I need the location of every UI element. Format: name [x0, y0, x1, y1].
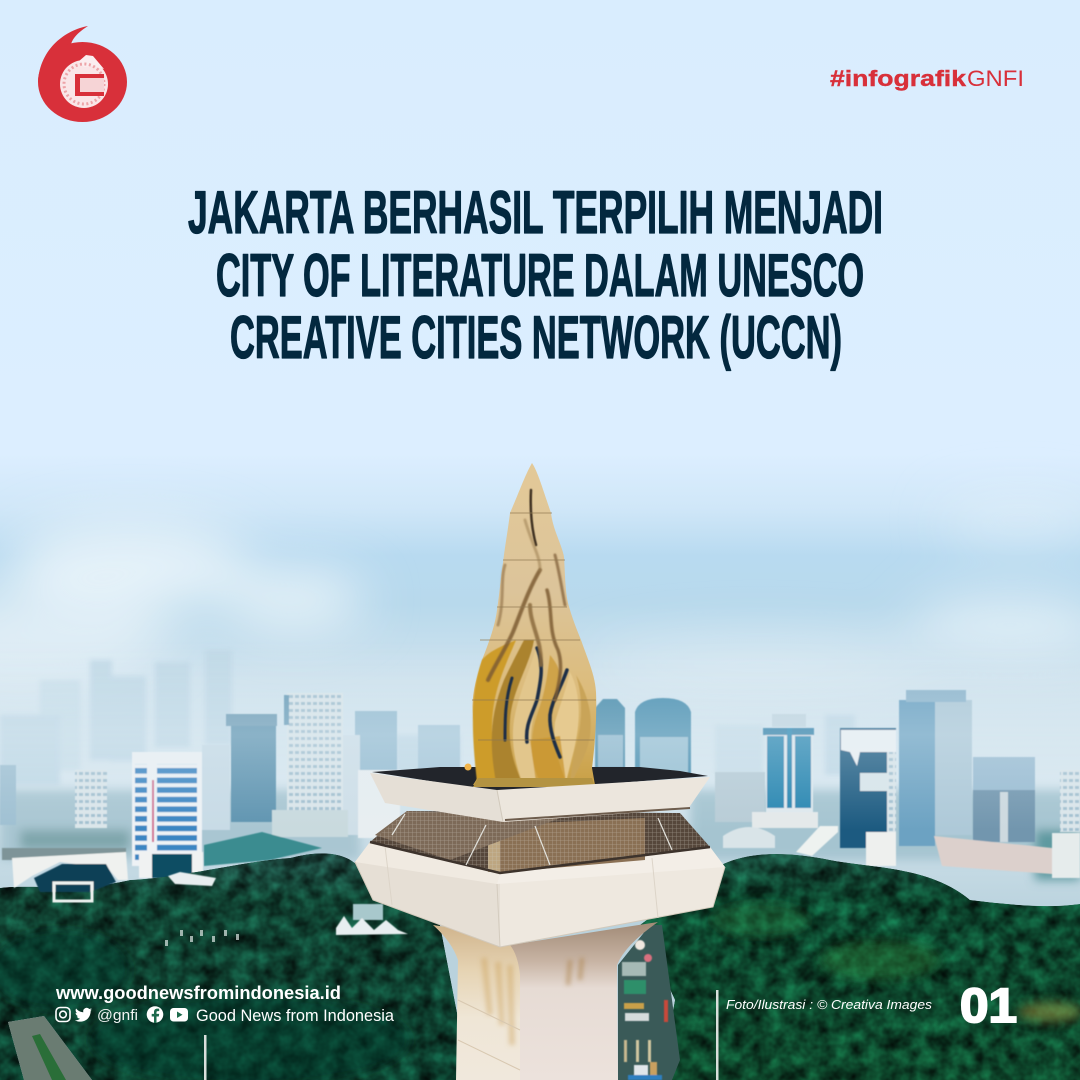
title — [188, 179, 883, 371]
icon: facebook — [147, 1006, 163, 1023]
white striped tower — [132, 752, 203, 878]
hashtag label: GNFI — [967, 66, 1024, 91]
upper bowl top — [372, 767, 708, 792]
construction tower — [272, 693, 348, 837]
crowded road — [618, 925, 680, 1080]
icon: twitter — [75, 1008, 92, 1022]
lamp poles — [204, 990, 718, 1080]
white block by monument — [358, 770, 400, 838]
icon: instagram — [56, 1008, 70, 1022]
right city buildings — [715, 690, 1080, 878]
teal roof — [204, 832, 322, 866]
buildings behind flame — [595, 698, 691, 775]
left low building — [2, 848, 128, 901]
hashtag label — [830, 66, 1024, 91]
photo credit: Foto/Ilustrasi : © Creativa Images — [726, 997, 933, 1012]
handle: @gnfi — [97, 1007, 138, 1024]
left city buildings — [0, 693, 460, 878]
parked cars — [165, 930, 239, 946]
blue tower — [226, 714, 277, 822]
upper bowl platform — [370, 764, 710, 822]
right middle blocks — [973, 757, 1035, 842]
low pink building — [934, 836, 1052, 874]
forest left — [0, 853, 470, 1080]
hashtag label: #infografik — [830, 66, 967, 91]
dome pavilion — [723, 827, 775, 848]
white tents — [168, 872, 408, 935]
logo — [38, 26, 127, 122]
clouds — [0, 500, 1080, 691]
haze over city — [0, 640, 1080, 830]
page name: Good News from Indonesia — [196, 1006, 395, 1025]
footer website: www.goodnewsfromindonesia.id — [55, 983, 341, 1003]
lower platform — [355, 842, 725, 947]
hazy mid-ground city — [0, 790, 1080, 880]
forest right — [640, 854, 1080, 1080]
sunlit tree patches — [0, 902, 1080, 1080]
tall glass tower — [899, 690, 972, 846]
monument shaft — [433, 922, 658, 1080]
dark tower with white crown — [840, 728, 896, 866]
blue twin tower — [763, 714, 814, 816]
safety mesh — [370, 811, 710, 873]
page number: 01 — [960, 980, 1017, 1033]
golden flame — [472, 463, 596, 787]
small striped block — [75, 770, 107, 828]
street left — [8, 1016, 92, 1080]
icon: youtube — [170, 1008, 188, 1022]
hazy far skyline — [0, 650, 855, 785]
